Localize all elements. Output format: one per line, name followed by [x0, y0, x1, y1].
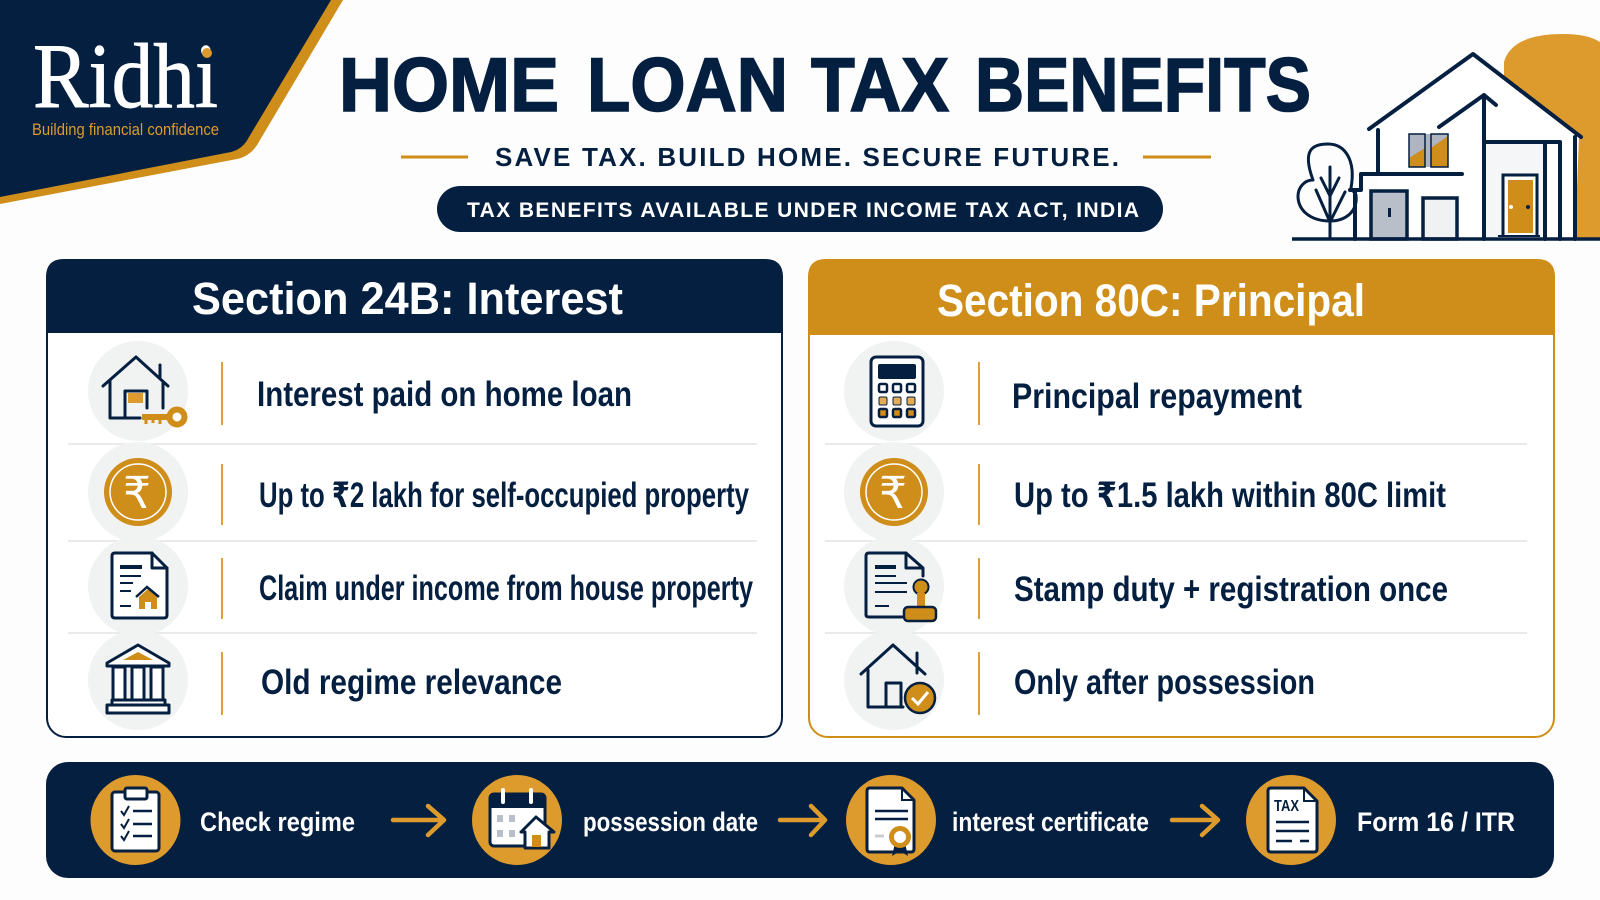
icon: calendar and house	[472, 775, 562, 865]
title: HOME	[339, 43, 559, 128]
panel: section 80C: Principal repayment	[1012, 377, 1302, 416]
act pill	[437, 186, 1163, 232]
row text	[978, 652, 980, 715]
logo banner	[0, 0, 343, 204]
row text	[221, 464, 223, 525]
panel header: section 80C	[808, 259, 1555, 335]
panel: section 24B: Up to ₹2 lakh for self-occupied property	[259, 476, 749, 515]
arrow	[780, 806, 825, 835]
row text	[978, 464, 980, 525]
subtitle: SAVE TAX. BUILD HOME. SECURE FUTURE.	[495, 142, 1119, 172]
row text	[221, 558, 223, 619]
title	[339, 43, 1311, 128]
garage door	[1423, 198, 1457, 239]
icon: bank building	[88, 630, 188, 730]
icon: tax document: TAX	[1274, 798, 1299, 815]
row text	[221, 652, 223, 715]
icon: rupee coin	[88, 442, 188, 542]
icon: tax document	[1246, 775, 1336, 865]
act pill: TAX BENEFITS AVAILABLE UNDER INCOME TAX ACT, INDIA	[467, 199, 1139, 222]
icon: rupee coin	[844, 442, 944, 542]
icon: document and stamp	[844, 536, 944, 636]
panel: section 80C	[808, 259, 1555, 737]
house lines	[1350, 54, 1581, 239]
step label: Form 16 / ITR	[1357, 807, 1515, 837]
arrow	[1172, 806, 1218, 835]
icon: checklist	[90, 775, 180, 865]
ground line	[1292, 237, 1600, 241]
title: LOAN	[587, 43, 788, 128]
panel header: section 24B	[46, 259, 783, 333]
icon: house document	[88, 536, 188, 636]
heading: section 24B: Section 24B: Interest	[192, 273, 623, 324]
title: BENEFITS	[975, 43, 1311, 128]
icon: house with check	[844, 630, 944, 730]
step label: interest certificate	[952, 807, 1149, 837]
front door	[1498, 175, 1540, 236]
window	[1409, 134, 1448, 167]
icon: certificate	[846, 775, 936, 865]
logo wordmark: Ridhi	[33, 25, 218, 127]
panel: section 24B	[46, 259, 783, 737]
panel: section 80C: Up to ₹1.5 lakh within 80C limit	[1014, 476, 1446, 515]
row text	[978, 558, 980, 619]
icon: calculator	[844, 341, 944, 441]
panel: section 80C: Stamp duty + registration once	[1014, 570, 1448, 609]
left door	[1371, 191, 1407, 239]
logo dot	[202, 48, 212, 58]
panel: section 24B: Old regime relevance	[261, 663, 562, 702]
arrow	[393, 806, 444, 835]
row text	[978, 362, 980, 425]
icon: rupee coin: ₹	[879, 469, 907, 518]
panel: section 24B: Claim under income from house property	[259, 569, 753, 608]
panel: section 24B: Interest paid on home loan	[257, 375, 632, 414]
tree	[1298, 144, 1356, 239]
step label: Check regime	[200, 807, 355, 837]
footer process bar	[46, 762, 1554, 878]
logo tagline: Building financial confidence	[32, 121, 219, 139]
heading: section 80C: Section 80C: Principal	[937, 275, 1365, 326]
house illustration	[1292, 34, 1600, 239]
sun	[1504, 34, 1600, 238]
title: TAX	[811, 43, 949, 128]
icon: rupee coin: ₹	[123, 469, 151, 518]
icon: house and key	[88, 341, 188, 441]
row text	[221, 362, 223, 425]
panel: section 80C: Only after possession	[1014, 663, 1315, 702]
step label: possession date	[583, 807, 758, 837]
